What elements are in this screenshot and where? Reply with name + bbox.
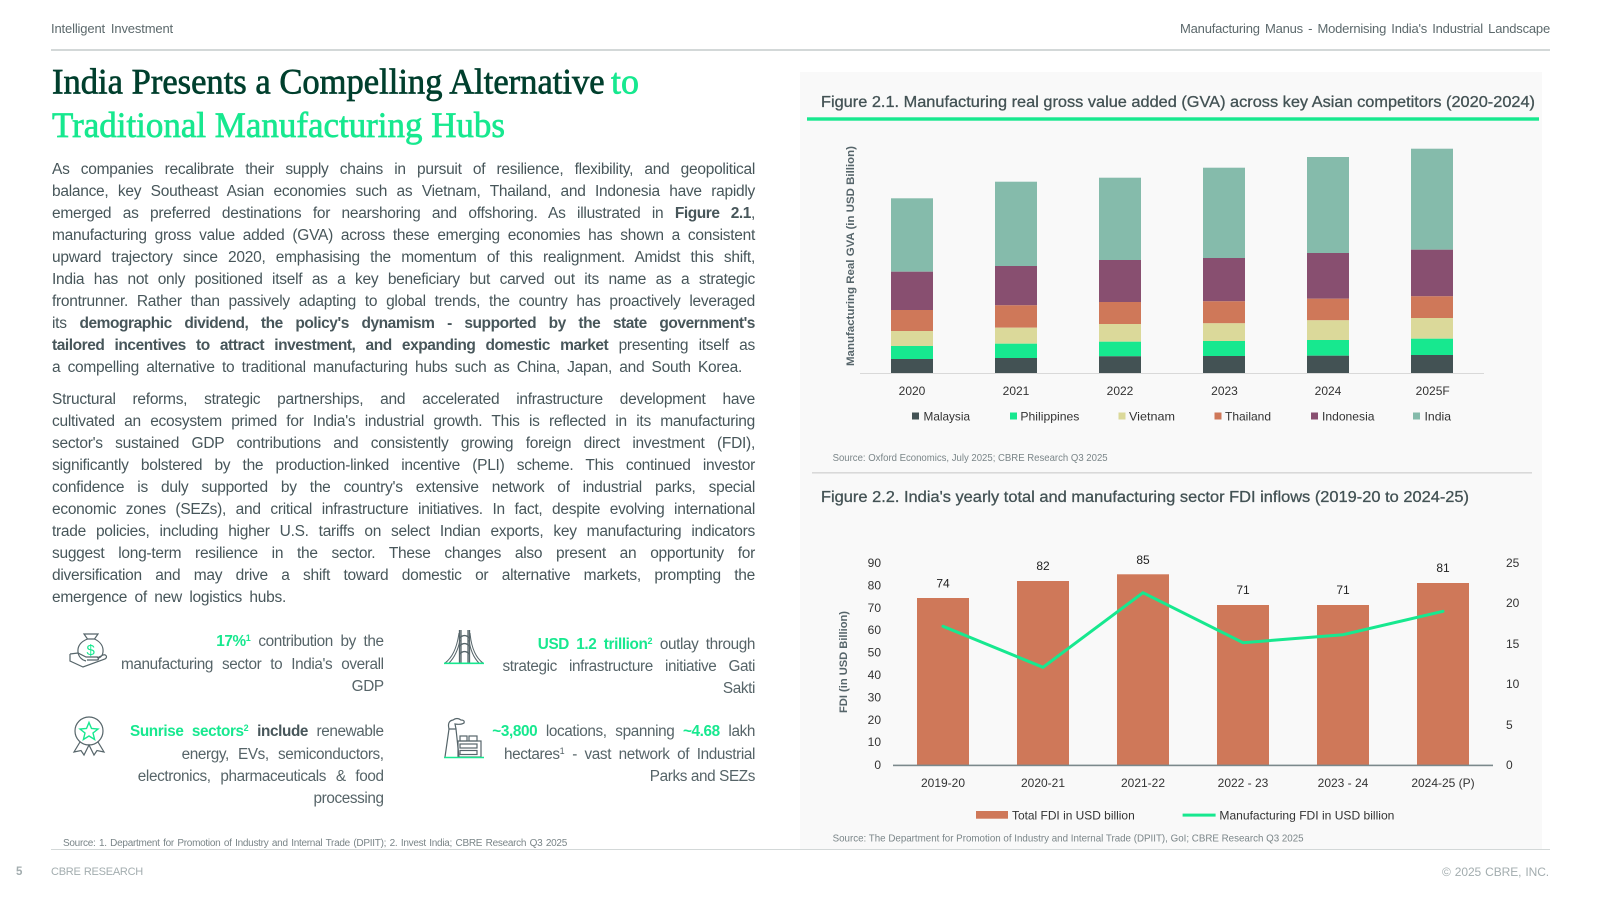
left axis ticks: 60 [868, 623, 881, 637]
y axis label: Manufacturing Real GVA (in USD Billion) [845, 146, 857, 366]
bar value labels: 85 [1136, 553, 1150, 567]
title: to [611, 62, 639, 102]
left axis ticks: 90 [868, 556, 881, 570]
left axis ticks: 20 [868, 713, 881, 727]
icon: bridge [444, 630, 484, 664]
stat: 17% contribution to GDP: 17%1 contribution by the [216, 633, 384, 650]
stat: sunrise sectors: electronics, pharmaceuticals & food [138, 768, 384, 785]
legend: Malaysia [924, 410, 970, 424]
icon: money bag on hand: $ [87, 642, 96, 659]
x axis labels: 2020-21 [1021, 776, 1065, 790]
icon: award ribbon with star [72, 716, 106, 756]
text block: second paragraph: suggest long-term resilience in the sector. These changes also present an opportunity for [52, 545, 755, 562]
text block: second paragraph: diversification and may drive a shift toward domestic or alternative markets, prompting the [52, 567, 755, 584]
source note: figure 2.1: Source: Oxford Economics, July 2025; CBRE Research Q3 2025 [833, 452, 1108, 464]
legend [912, 410, 1451, 424]
left axis ticks [868, 556, 881, 772]
x axis labels: 2021-22 [1121, 776, 1165, 790]
text block: second paragraph: emergence of new logistics hubs. [52, 589, 286, 606]
text block: first paragraph: balance, key Southeast Asian economies such as Vietnam, Thailand, and Indonesia have rapidly [52, 183, 755, 200]
stat: USD 1.2 trillion Gati Sakti: Sakti [723, 680, 755, 697]
text block: first paragraph [52, 161, 756, 376]
x axis labels: 2025F [1416, 384, 1450, 398]
right axis ticks: 10 [1506, 677, 1520, 691]
heading: figure 2.2: Figure 2.2. India's yearly total and manufacturing sector FDI inflows (2019-20 to 2024-25) [821, 489, 1469, 506]
legend [976, 808, 1394, 822]
bars: 2022 [1099, 178, 1141, 373]
bar value labels: 71 [1236, 583, 1250, 597]
left axis ticks: 50 [868, 646, 881, 660]
text block: first paragraph: emerged as preferred destinations for nearshoring and offshoring. As illustrated in Figure 2.1, [52, 205, 755, 222]
text block: second paragraph: sector's sustained GDP contributions and consistently growing foreign direct investment (FDI), [52, 435, 755, 452]
text block: second paragraph: confidence is duly supported by the country's extensive network of industrial parks, special [52, 479, 755, 496]
legend: Total FDI in USD billion [1012, 808, 1135, 822]
text block: second paragraph: Structural reforms, strategic partnerships, and accelerated infrastructure development have [52, 391, 755, 408]
text block: first paragraph: a compelling alternative to traditional manufacturing hubs such as China, Japan, and South Korea. [52, 359, 742, 376]
legend: Indonesia [1322, 410, 1375, 424]
stat: sunrise sectors: processing [314, 790, 384, 807]
bars: 2021 [995, 182, 1037, 373]
footer: page number: 5 [16, 866, 22, 878]
bar value labels: 71 [1336, 583, 1350, 597]
heading: figure 2.1: Figure 2.1. Manufacturing real gross value added (GVA) across key Asian competitors (2020-2024) [821, 94, 1535, 111]
x axis labels: 2020 [899, 384, 926, 398]
legend: Philippines [1020, 410, 1079, 424]
x axis labels: 2019-20 [921, 776, 965, 790]
bar value labels: 74 [936, 576, 950, 590]
stat: 3,800 locations: hectares1 - vast network of Industrial [504, 746, 755, 762]
right axis ticks: 20 [1506, 596, 1520, 610]
text block: second paragraph [52, 391, 756, 606]
right axis ticks: 0 [1506, 758, 1513, 772]
stat: sunrise sectors: Sunrise sectors2 include renewable [130, 723, 384, 740]
x axis labels [921, 776, 1475, 790]
panel: figures [807, 94, 1539, 844]
source note: figure 2.2: Source: The Department for Promotion of Industry and Internal Trade (DPIIT), GoI; CBRE Research Q3 2025 [833, 832, 1304, 844]
text block: second paragraph: cultivated an ecosystem primed for India's industrial growth. This is reflected in its manufacturing [52, 413, 755, 430]
left axis ticks: 10 [868, 735, 881, 749]
text block: second paragraph: economic zones (SEZs), and critical infrastructure initiatives. In fact, despite evolving international [52, 501, 755, 518]
bar value labels [936, 553, 1450, 597]
bars: 2024 [1307, 157, 1349, 373]
source note: left column: Source: 1. Department for Promotion of Industry and Internal Trade (DPIIT); 2. Invest India; CBRE Research Q3 2025 [63, 838, 567, 849]
bar value labels: 82 [1036, 559, 1050, 573]
x axis labels: 2023 - 24 [1318, 776, 1369, 790]
title: Traditional Manufacturing Hubs [52, 105, 505, 145]
footer: CBRE research: CBRE RESEARCH [51, 866, 143, 878]
right axis ticks: 15 [1506, 637, 1520, 651]
text block: first paragraph: tailored incentives to attract investment, and expanding domestic market presenting itself as [52, 337, 755, 354]
x axis labels: 2023 [1211, 384, 1238, 398]
icon: factory [444, 718, 484, 758]
text block: first paragraph: its demographic dividend, the policy's dynamism - supported by the state government's [52, 315, 755, 332]
text block: second paragraph: significantly bolstered by the production-linked incentive (PLI) scheme. This continued investor [52, 457, 755, 474]
legend: Vietnam [1129, 410, 1175, 424]
left axis ticks: 80 [868, 578, 881, 592]
title: India Presents a Compelling Alternative [52, 62, 605, 102]
text block: first paragraph: India has not only positioned itself as a key beneficiary but carved out its name as a strategic [52, 271, 755, 288]
heading: figure 2.1 [807, 94, 1539, 121]
stat: 17% contribution to GDP: manufacturing sector to India's overall [121, 656, 384, 673]
stat: USD 1.2 trillion Gati Sakti: USD 1.2 trillion2 outlay through [538, 636, 755, 653]
x axis labels: 2021 [1003, 384, 1030, 398]
stat: sunrise sectors [72, 716, 384, 807]
text block: second paragraph: trade policies, including higher U.S. tariffs on select Indian exports, key manufacturing indicators [52, 523, 755, 540]
left axis ticks: 40 [868, 668, 881, 682]
bars: 2023 [1203, 168, 1245, 373]
text block: first paragraph: upward trajectory since 2020, emphasising the momentum of this realignment. Amidst this shift, [52, 249, 755, 266]
left axis ticks: 0 [874, 758, 881, 772]
manufacturing FDI line [943, 593, 1443, 667]
bars: 2025F [1411, 149, 1453, 373]
title [52, 62, 639, 145]
total FDI bars [917, 574, 1469, 765]
text block: first paragraph: As companies recalibrate their supply chains in pursuit of resilience, flexibility, and geopolitical [52, 161, 755, 178]
text block: first paragraph: manufacturing gross value added (GVA) across these emerging economies has shown a consistent [52, 227, 755, 244]
stat: USD 1.2 trillion Gati Sakti: strategic infrastructure initiative Gati [502, 658, 755, 675]
legend: Thailand [1225, 410, 1271, 424]
footer: copyright: © 2025 CBRE, INC. [1442, 865, 1549, 879]
right axis ticks: 25 [1506, 556, 1520, 570]
stat: USD 1.2 trillion Gati Sakti [444, 630, 755, 697]
stat: 17% contribution to GDP [69, 633, 384, 695]
stat: 17% contribution to GDP: GDP [352, 678, 384, 695]
x axis labels: 2022 - 23 [1218, 776, 1269, 790]
chart: FDI bars and line [838, 553, 1520, 822]
text block: first paragraph: frontrunner. Rather than passively adapting to global trends, the country has proactively leveraged [52, 293, 755, 310]
stat: 3,800 locations: Parks and SEZs [650, 768, 755, 785]
stat: sunrise sectors: energy, EVs, semiconductors, [182, 746, 384, 762]
chart: stacked bars of GVA by country [845, 146, 1484, 424]
right axis ticks [1506, 556, 1520, 772]
x axis labels: 2024 [1315, 384, 1342, 398]
legend: Manufacturing FDI in USD billion [1219, 808, 1394, 822]
x axis labels: 2024-25 (P) [1411, 776, 1475, 790]
left axis ticks: 70 [868, 601, 881, 615]
left axis ticks: 30 [868, 690, 881, 704]
x axis labels: 2022 [1107, 384, 1134, 398]
y axis label: FDI (in USD Billion) [838, 611, 850, 713]
bars: 2020 [891, 198, 933, 373]
right axis ticks: 5 [1506, 718, 1513, 732]
stat: 3,800 locations [444, 718, 755, 785]
x axis labels [899, 384, 1450, 398]
stat: 3,800 locations: ~3,800 locations, spanning ~4.68 lakh [492, 723, 755, 740]
legend: India [1424, 410, 1451, 424]
header: report title: Manufacturing Manus - Modernising India's Industrial Landscape [1180, 21, 1550, 36]
icon: money bag on hand [69, 633, 108, 668]
header: report section: Intelligent Investment [51, 21, 173, 36]
bar value labels: 81 [1436, 561, 1450, 575]
